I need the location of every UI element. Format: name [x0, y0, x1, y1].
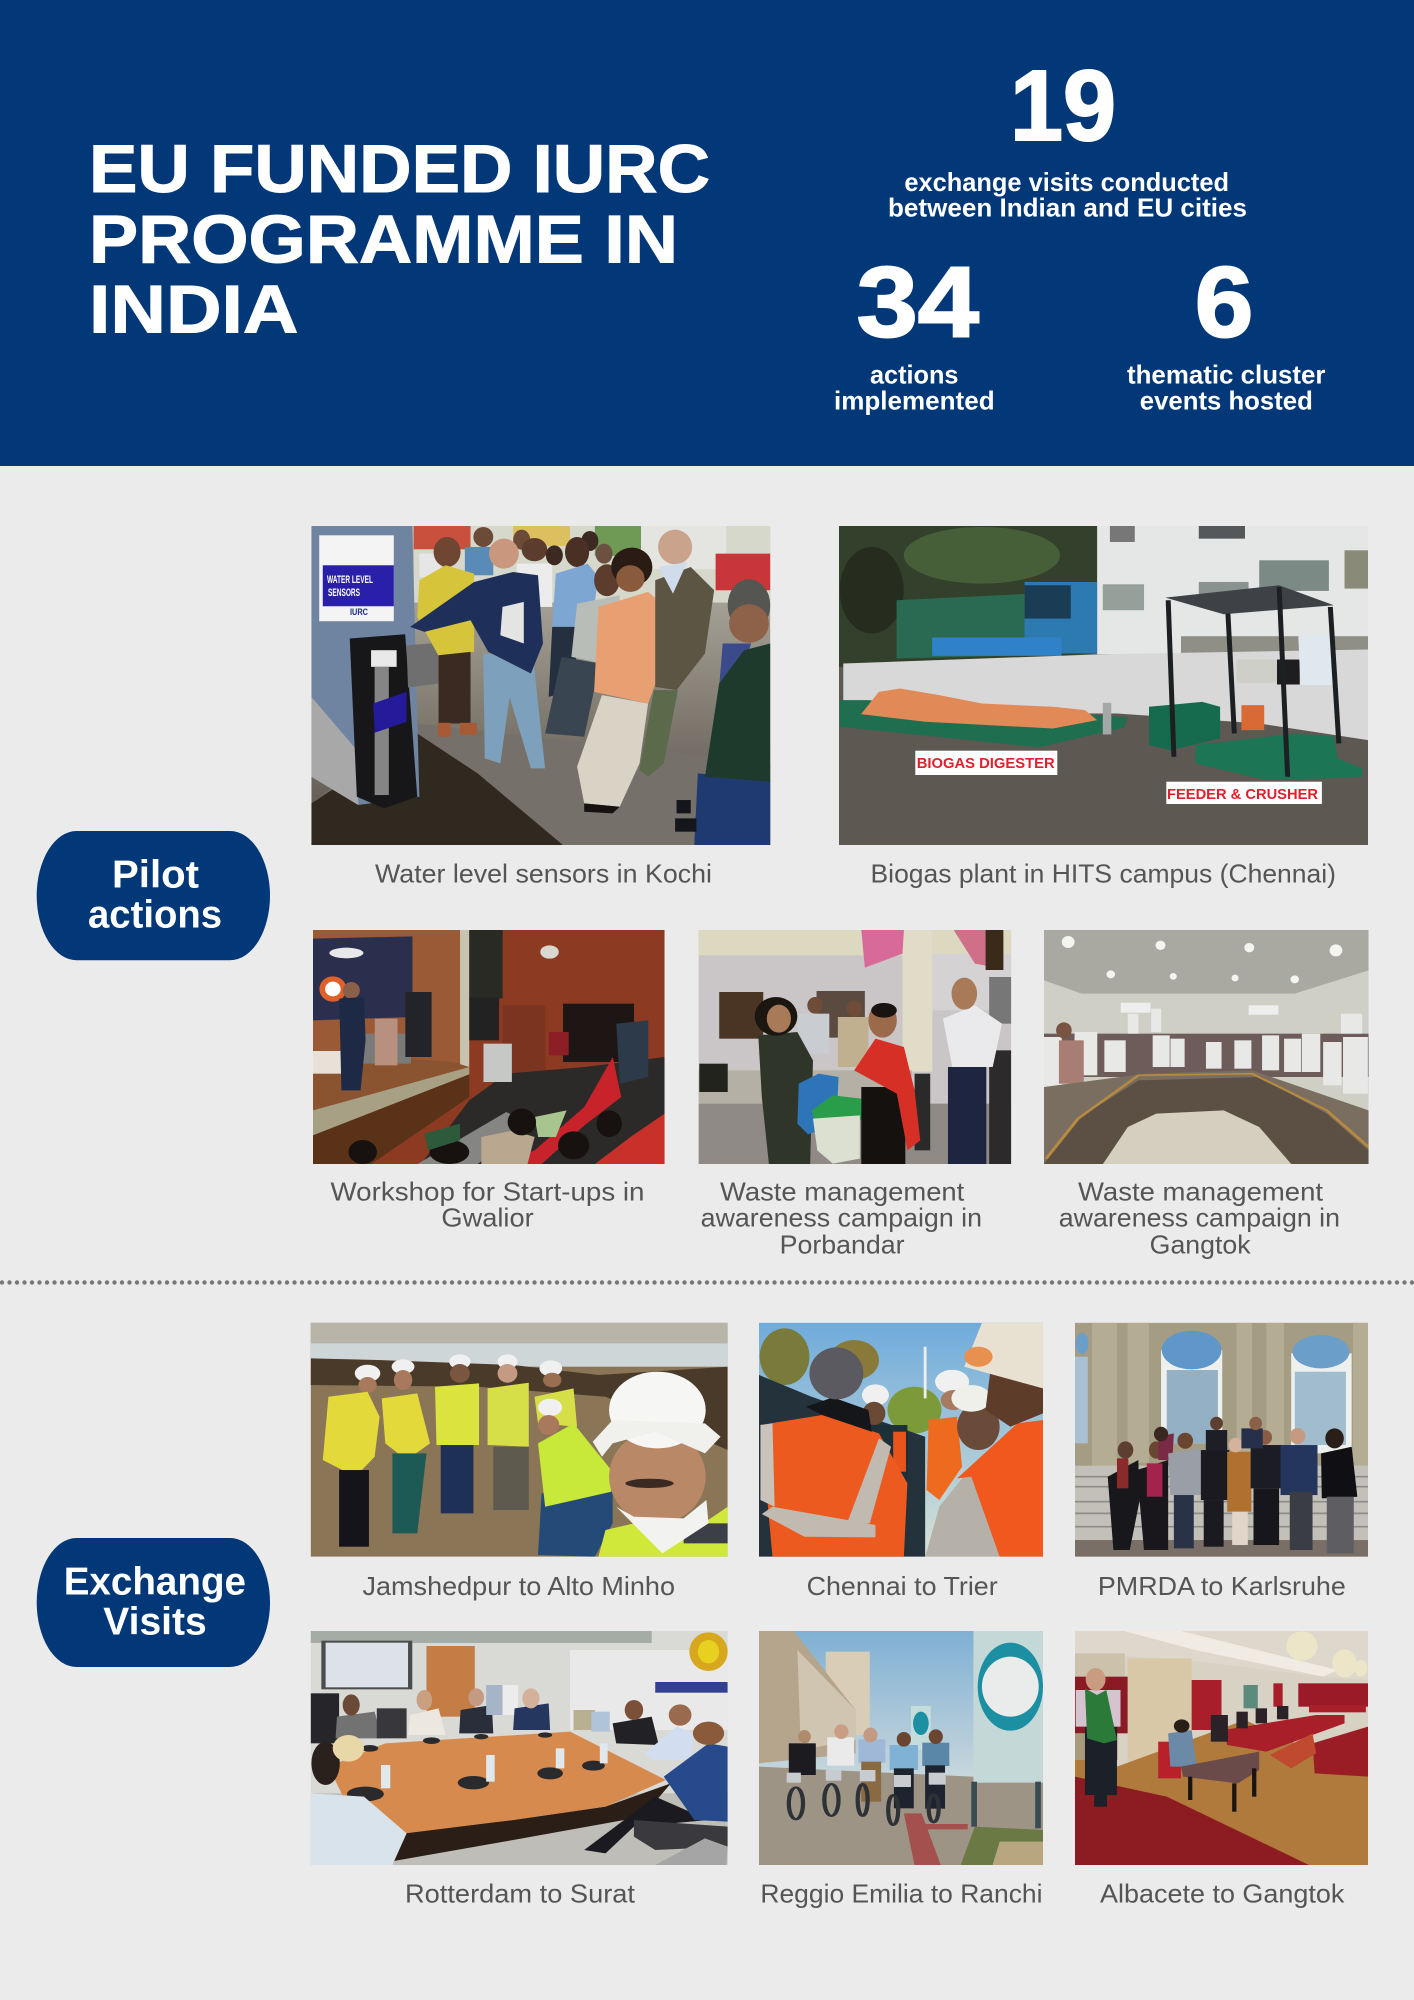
stat: 19 exchange visits — [888, 50, 1247, 223]
standing man with green scarf — [1076, 1668, 1121, 1807]
selfie man with white helmet — [593, 1372, 728, 1557]
photo: Jamshedpur to Alto Minho — [311, 1323, 728, 1557]
arched windows — [1075, 1331, 1352, 1453]
caption: Reggio Emilia to Ranchi: Reggio Emilia to Ranchi — [760, 1879, 1042, 1909]
title: PROGRAMME IN — [89, 202, 678, 278]
stat: 34 actions implemented — [834, 246, 995, 415]
people seated behind table — [336, 1685, 659, 1745]
man in white shirt — [943, 978, 1002, 1164]
woman in dark sari — [755, 997, 813, 1164]
photo: Reggio Emilia to Ranchi — [759, 1631, 1043, 1865]
caption: PMRDA to Karlsruhe: PMRDA to Karlsruhe — [1098, 1571, 1346, 1601]
photo: water level sensors in Kochi: WATER LEVEL — [327, 574, 373, 586]
title: EU FUNDED IURC — [89, 131, 710, 207]
photo: water level sensors in Kochi — [311, 526, 770, 845]
biogas digester — [840, 688, 1128, 747]
header banner — [0, 0, 1414, 466]
photo: Albacete to Gangtok — [1075, 1631, 1368, 1865]
stat: 34 actions implemented: actions — [870, 359, 958, 389]
photo: Rotterdam to Surat — [311, 1631, 728, 1865]
label: feeder and crusher: FEEDER & CRUSHER — [1167, 786, 1318, 803]
workers in vests — [323, 1354, 613, 1557]
pill: Pilot actions — [37, 831, 270, 960]
woman with red scarf — [854, 1003, 920, 1164]
photo: biogas plant in HITS campus — [839, 526, 1368, 845]
cyclists — [787, 1724, 949, 1825]
title — [89, 131, 710, 348]
caption: workshop: Gwalior — [441, 1203, 534, 1233]
people holding posters — [1044, 1009, 1369, 1094]
men in background — [862, 1370, 969, 1500]
label: biogas digester: BIOGAS DIGESTER — [917, 755, 1055, 772]
photo: waste management campaign in Gangtok — [1044, 930, 1369, 1164]
caption: Gangtok — [1059, 1177, 1340, 1259]
stat: 19 exchange visits: exchange visits conducted — [904, 167, 1229, 197]
man in navy jacket — [410, 539, 545, 768]
blue and green bins — [797, 1074, 861, 1164]
caption: Jamshedpur to Alto Minho: Jamshedpur to Alto Minho — [362, 1571, 675, 1601]
yellow shirt man — [417, 537, 477, 737]
caption: Porbandar — [701, 1177, 982, 1259]
man in tan jacket — [640, 530, 714, 777]
caption: Rotterdam to Surat: Rotterdam to Surat — [405, 1879, 636, 1909]
red banquet tables — [1211, 1705, 1368, 1777]
pill: Exchange Visits — [37, 1538, 270, 1667]
label: biogas digester — [915, 751, 1057, 775]
feeder and crusher — [1149, 585, 1362, 780]
caption: biogas plant: Biogas plant in HITS campus (Chennai) — [870, 859, 1336, 889]
photo: workshop for start-ups in Gwalior — [313, 930, 665, 1164]
back crowd — [419, 527, 751, 737]
boardroom table — [328, 1732, 671, 1865]
caption: Porbandar: Porbandar — [780, 1229, 905, 1259]
speaker on stage — [339, 982, 432, 1090]
caption: Gangtok: awareness campaign in — [1059, 1203, 1340, 1233]
man in foreground — [311, 1735, 407, 1865]
stat: 6 thematic cluster events: events hosted — [1140, 385, 1313, 415]
conference table — [1044, 1070, 1369, 1164]
caption: Gangtok: Waste management — [1078, 1177, 1324, 1207]
stat: 19 exchange visits: between Indian and EU cities — [888, 193, 1247, 223]
pill: Pilot actions: Pilot — [112, 853, 199, 896]
photo: Chennai to Trier — [759, 1323, 1043, 1557]
pill: Exchange Visits: Exchange — [64, 1560, 246, 1603]
caption: workshop — [330, 1177, 644, 1233]
caption: Albacete to Gangtok: Albacete to Gangtok — [1100, 1879, 1345, 1909]
caption: Porbandar: Waste management — [720, 1177, 965, 1207]
man in hard hat, right — [925, 1323, 1043, 1557]
man in foreground — [675, 579, 770, 845]
photo: water level sensors in Kochi: SENSORS — [328, 587, 360, 599]
men seated at right — [584, 1704, 728, 1865]
caption: Porbandar: awareness campaign in — [701, 1203, 982, 1233]
audience — [349, 1020, 665, 1164]
small table with seated woman — [1158, 1719, 1259, 1812]
man in orange vest, from behind — [760, 1347, 907, 1557]
stat: 6 thematic cluster events — [1127, 246, 1326, 415]
delegation group — [1108, 1417, 1357, 1553]
stat: 34 actions implemented: implemented — [834, 385, 995, 415]
stat: 6 thematic cluster events: 6 — [1195, 246, 1253, 358]
caption: Gangtok: Gangtok — [1150, 1229, 1252, 1259]
photo: waste management campaign in Porbandar — [699, 930, 1011, 1164]
pill: Exchange Visits: Visits — [103, 1600, 207, 1643]
bicycle sign — [911, 1631, 1043, 1828]
stat: 19 exchange visits: 19 — [1010, 50, 1116, 162]
caption: Chennai to Trier: Chennai to Trier — [807, 1571, 998, 1601]
stat: 6 thematic cluster events: thematic cluster — [1127, 359, 1326, 389]
pill: Pilot actions: actions — [88, 894, 222, 937]
man in orange shirt — [577, 548, 678, 813]
photo: water level sensors in Kochi: IURC — [350, 607, 368, 617]
caption: workshop: Workshop for Start-ups in — [330, 1177, 644, 1207]
caption: water level sensors: Water level sensors in Kochi — [375, 859, 712, 889]
photo: PMRDA to Karlsruhe — [1075, 1323, 1368, 1557]
title: INDIA — [89, 272, 298, 348]
stat: 34 actions implemented: 34 — [857, 246, 979, 358]
